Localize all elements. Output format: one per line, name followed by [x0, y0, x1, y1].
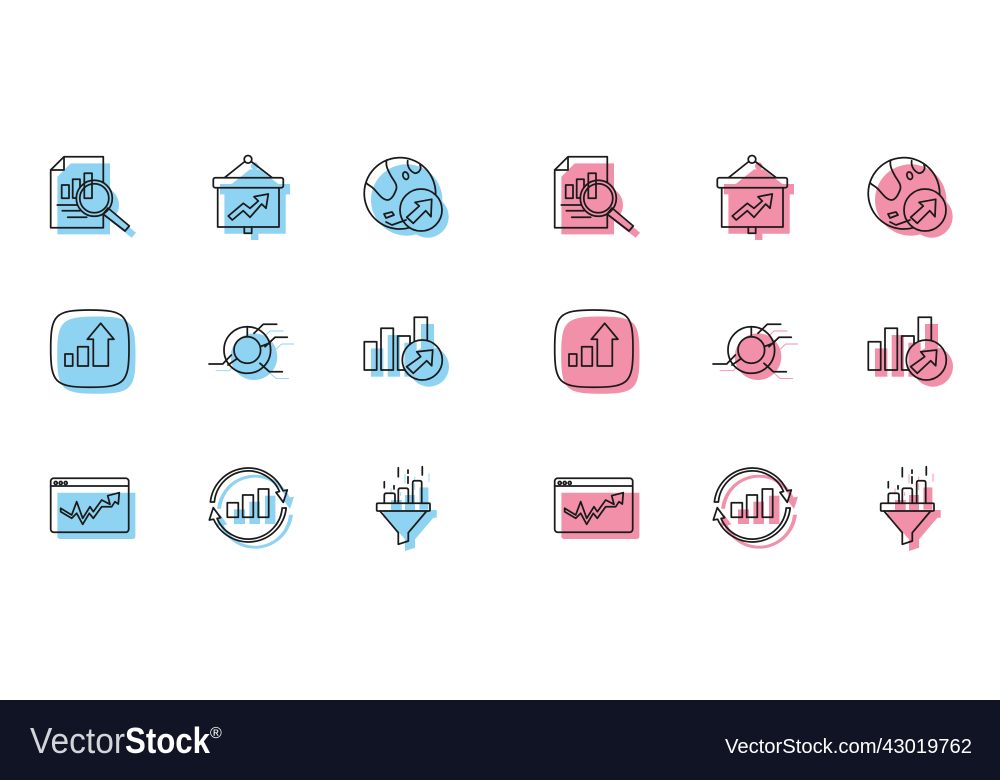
- icon: bar chart with arrow badge, pink: [868, 317, 953, 387]
- icon: bar chart with arrow badge: [364, 317, 449, 387]
- icon: report with magnifier, pink: [555, 157, 640, 238]
- footer logo: ®: [210, 725, 222, 742]
- footer logo: Vector: [30, 720, 125, 761]
- icon: donut chart with callouts, pink: [713, 324, 798, 380]
- icon: refresh arrows with bars: [209, 468, 294, 549]
- icon: rounded square growth chart: [51, 310, 136, 394]
- panel: blue icon set: [51, 156, 449, 551]
- icon: data funnel: [377, 467, 437, 551]
- icon: browser window with trend line, pink: [555, 478, 639, 539]
- footer image id: VectorStock.com/43019762: [725, 736, 972, 758]
- footer bar: [0, 700, 1000, 780]
- icon: globe with arrow: [364, 158, 449, 238]
- icon: presentation board with rising arrow: [213, 156, 290, 240]
- icon: data funnel, pink: [881, 467, 941, 551]
- icon: rounded square growth chart, pink: [555, 310, 640, 394]
- icon: presentation board with rising arrow, pink: [717, 156, 794, 240]
- icon: refresh arrows with bars, pink: [713, 468, 798, 549]
- icon: report with magnifier: [51, 157, 136, 238]
- footer logo: [30, 720, 222, 761]
- panel: pink icon set: [555, 156, 953, 551]
- footer logo: Stock: [125, 720, 211, 761]
- icon: donut chart with callouts: [209, 324, 294, 380]
- icon: browser window with trend line: [51, 478, 135, 539]
- icon: globe with arrow, pink: [868, 158, 953, 238]
